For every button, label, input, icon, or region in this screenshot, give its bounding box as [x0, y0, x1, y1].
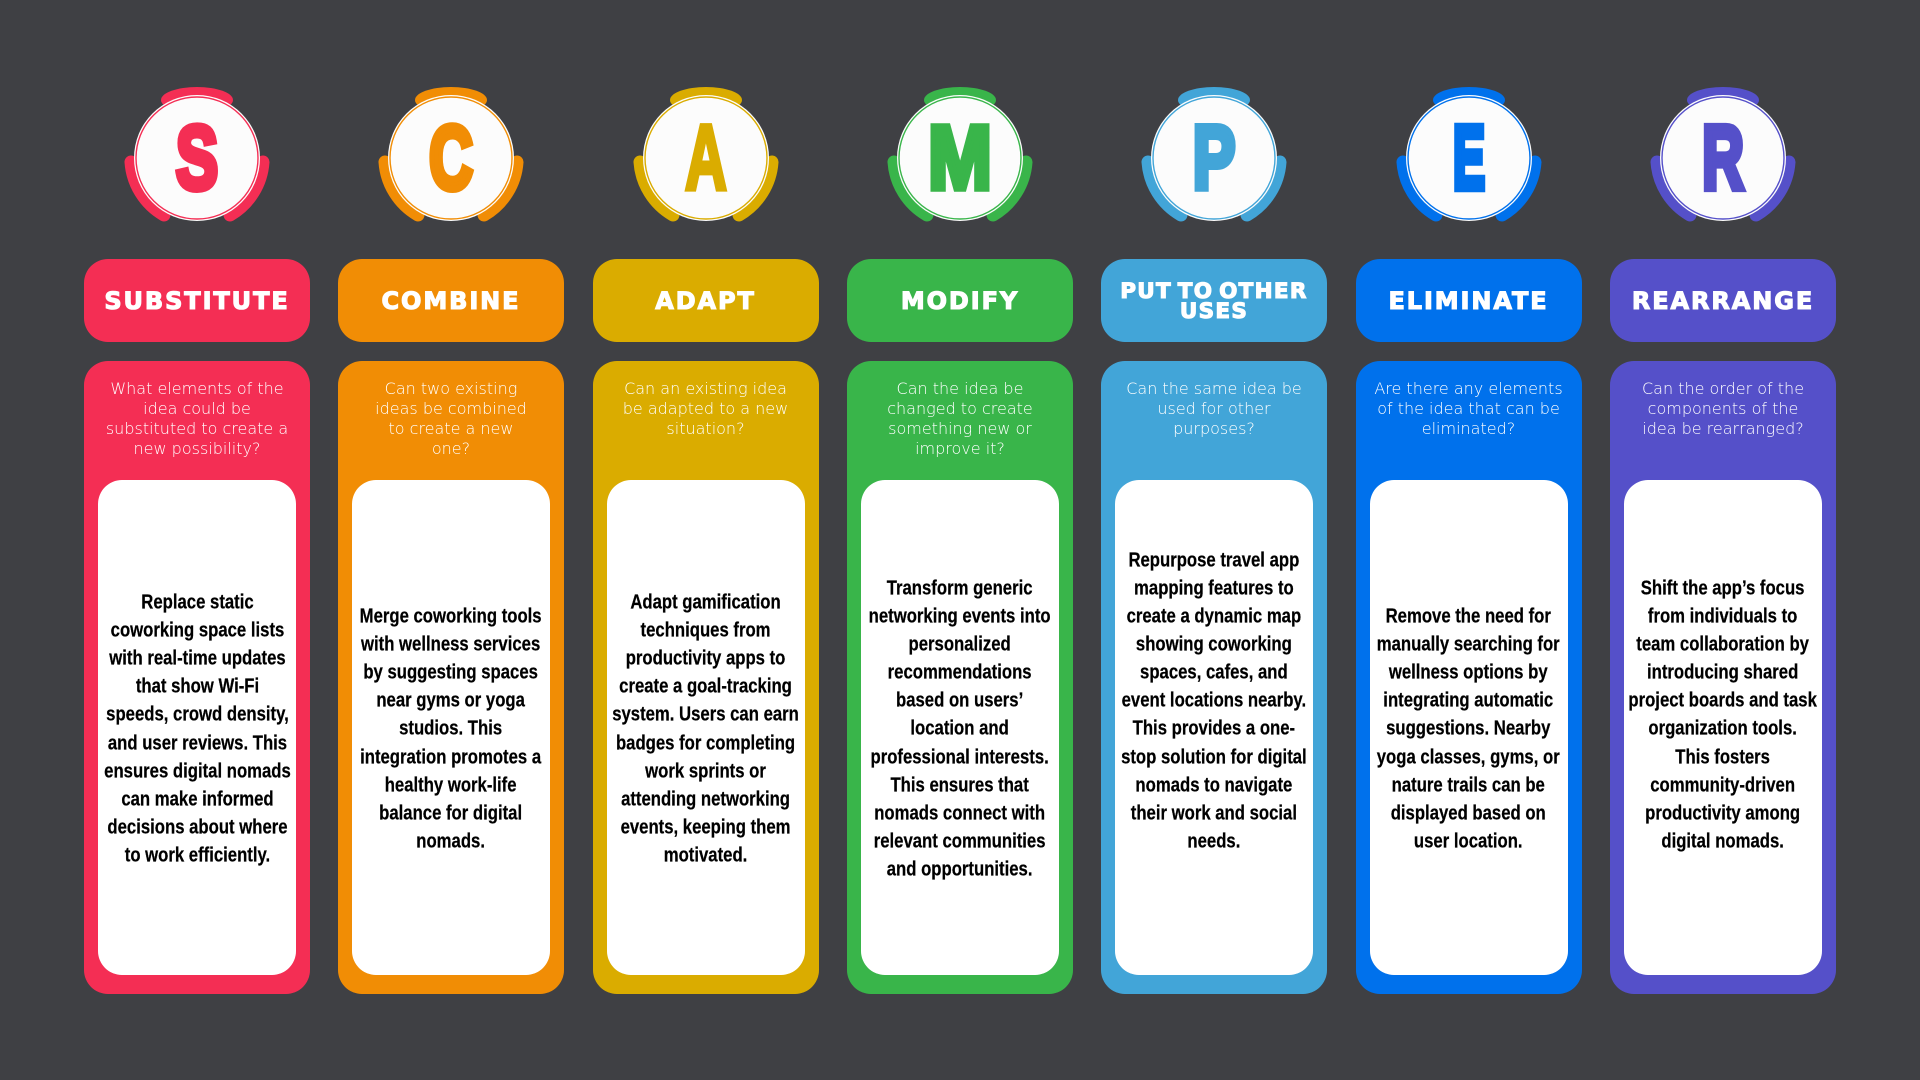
text card: adapt: badges for completing	[616, 731, 795, 754]
text card: substitute: speeds, crowd density,	[106, 703, 288, 726]
text card: put to other uses: spaces, cafes, and	[1140, 661, 1288, 684]
text card: combine: healthy work-life	[385, 773, 517, 796]
question: eliminate: Are there any elements	[1374, 378, 1563, 398]
text card: rearrange: Shift the app’s focus	[1641, 577, 1805, 600]
text card: eliminate: suggestions. Nearby	[1386, 717, 1551, 740]
text card: modify	[861, 480, 1059, 975]
text card: put to other uses: Repurpose travel app	[1129, 549, 1299, 572]
question: combine: one?	[432, 438, 470, 458]
heading: put to other uses: USES	[1180, 298, 1248, 324]
question: substitute: new possibility?	[134, 438, 260, 458]
text card: eliminate: Remove the need for	[1386, 605, 1551, 628]
heading: rearrange: REARRANGE	[1632, 286, 1814, 314]
question: substitute	[106, 378, 288, 458]
text card: put to other uses: their work and social	[1131, 801, 1297, 824]
question: eliminate: eliminated?	[1422, 418, 1515, 438]
icon: letter E badge	[1396, 87, 1542, 222]
question: eliminate: of the idea that can be	[1377, 398, 1560, 418]
text card: eliminate: manually searching for	[1377, 633, 1560, 656]
text card: substitute: can make informed	[121, 787, 273, 810]
icon: letter S badge: S	[176, 109, 218, 208]
question: rearrange: Can the order of the	[1642, 378, 1804, 398]
question: substitute: substituted to create a	[106, 418, 288, 438]
heading: substitute	[84, 259, 310, 342]
icon: letter C badge: C	[429, 109, 473, 209]
column: rearrange	[1610, 87, 1836, 994]
text card: put to other uses: create a dynamic map	[1127, 605, 1301, 628]
icon: letter C badge	[378, 87, 524, 222]
text card: adapt: events, keeping them	[621, 815, 790, 838]
heading: eliminate: ELIMINATE	[1388, 286, 1549, 314]
icon: letter M badge: M	[928, 107, 992, 208]
text card: adapt: work sprints or	[645, 759, 766, 782]
text card: adapt: create a goal-tracking	[619, 675, 792, 698]
text card: modify: Transform generic	[887, 577, 1033, 600]
panel: adapt	[592, 361, 818, 994]
text card: combine: studios. This	[399, 717, 503, 740]
text card: rearrange	[1624, 480, 1822, 975]
heading: modify	[847, 259, 1073, 342]
text card: adapt: productivity apps to	[626, 647, 785, 670]
text card: modify: personalized	[909, 633, 1011, 656]
text card: substitute: Replace static	[141, 591, 253, 614]
text card: substitute: to work efficiently.	[124, 843, 270, 866]
text card: substitute: with real-time updates	[109, 647, 285, 670]
text card: modify: recommendations	[888, 661, 1032, 684]
text card: rearrange: from individuals to	[1648, 605, 1798, 628]
question: modify: Can the idea be	[897, 378, 1023, 398]
text card: eliminate: displayed based on	[1391, 801, 1546, 824]
text card: eliminate: user location.	[1414, 829, 1523, 852]
text card: put to other uses: This provides a one-	[1133, 717, 1295, 740]
text card: substitute: ensures digital nomads	[104, 759, 290, 782]
text card: rearrange: organization tools.	[1649, 717, 1797, 740]
question: modify: improve it?	[915, 438, 1005, 458]
text card: eliminate: wellness options by	[1389, 661, 1548, 684]
heading: adapt: ADAPT	[655, 286, 756, 314]
panel: modify	[847, 361, 1073, 994]
heading: combine	[338, 259, 564, 342]
text card: eliminate: integrating automatic	[1384, 689, 1553, 712]
text card: substitute	[98, 480, 296, 975]
text card: substitute: that show Wi-Fi	[135, 675, 259, 698]
text card: substitute: decisions about where	[107, 815, 287, 838]
question: put to other uses	[1126, 378, 1302, 438]
heading: adapt	[592, 259, 818, 342]
column: combine	[338, 87, 564, 994]
panel: combine	[338, 361, 564, 994]
icon: letter S badge	[124, 87, 270, 222]
panel: eliminate	[1356, 361, 1582, 994]
question: combine: ideas be combined	[375, 398, 527, 418]
icon: letter A badge	[634, 87, 778, 222]
question: modify: something new or	[888, 418, 1032, 438]
column: put to other uses	[1101, 87, 1327, 994]
question: rearrange: components of the	[1648, 398, 1798, 418]
question: eliminate	[1374, 378, 1563, 438]
text card: modify: This ensures that	[891, 773, 1029, 796]
text card: modify: networking events into	[869, 605, 1051, 628]
text card: combine: balance for digital	[380, 801, 522, 824]
column: eliminate	[1356, 87, 1582, 994]
text card: eliminate	[1370, 480, 1568, 975]
question: substitute: What elements of the	[110, 378, 284, 398]
text card: rearrange: team collaboration by	[1637, 633, 1809, 656]
text card: rearrange: community-driven	[1651, 773, 1795, 796]
text card: adapt: attending networking	[621, 787, 790, 810]
text card: substitute: coworking space lists	[110, 619, 284, 642]
heading: eliminate	[1356, 259, 1582, 342]
text card: rearrange: project boards and task	[1629, 689, 1817, 712]
text card: modify: and opportunities.	[887, 857, 1033, 880]
text card: put to other uses	[1115, 480, 1313, 975]
text card: combine	[352, 480, 550, 975]
text card: rearrange: introducing shared	[1647, 661, 1799, 684]
column: modify	[847, 87, 1073, 994]
question: adapt: Can an existing idea	[624, 378, 787, 398]
text card: put to other uses: event locations nearby.	[1122, 689, 1306, 712]
text card: modify: location and	[911, 717, 1009, 740]
text card: rearrange: This fosters	[1676, 745, 1770, 768]
text card: rearrange: digital nomads.	[1662, 829, 1784, 852]
text card: adapt	[606, 480, 804, 975]
text card: put to other uses: stop solution for digital	[1121, 745, 1307, 768]
heading: combine: COMBINE	[382, 286, 520, 314]
panel: put to other uses	[1101, 361, 1327, 994]
question: combine: to create a new	[388, 418, 513, 438]
question: substitute: idea could be	[143, 398, 251, 418]
text card: combine: integration promotes a	[360, 745, 542, 768]
text card: adapt: techniques from	[641, 619, 770, 642]
question: adapt	[623, 378, 788, 438]
question: rearrange: idea be rearranged?	[1642, 418, 1804, 438]
question: modify	[887, 378, 1033, 458]
text card: combine: with wellness services	[361, 633, 541, 656]
column: substitute	[84, 87, 310, 994]
text card: put to other uses: nomads to navigate	[1136, 773, 1292, 796]
text card: adapt: Adapt gamification	[630, 591, 781, 614]
icon: letter A badge: A	[685, 107, 726, 210]
text card: eliminate: yoga classes, gyms, or	[1377, 745, 1560, 768]
panel: substitute	[84, 361, 310, 994]
question: put to other uses: Can the same idea be	[1126, 378, 1302, 398]
question: put to other uses: used for other	[1157, 398, 1271, 418]
question: combine	[375, 378, 527, 458]
heading: rearrange	[1610, 259, 1836, 342]
text card: modify: based on users’	[896, 689, 1024, 712]
text card: substitute: and user reviews. This	[107, 731, 287, 754]
question: adapt: be adapted to a new	[623, 398, 788, 418]
panel: rearrange	[1610, 361, 1836, 994]
heading: put to other uses: PUT TO OTHER	[1120, 278, 1308, 304]
text card: modify: relevant communities	[874, 829, 1046, 852]
question: adapt: situation?	[666, 418, 745, 438]
icon: letter P badge	[1142, 87, 1286, 222]
icon: letter P badge: P	[1193, 107, 1235, 208]
question: rearrange	[1642, 378, 1804, 438]
text card: combine: Merge coworking tools	[360, 605, 542, 628]
text card: combine: by suggesting spaces	[364, 661, 538, 684]
text card: rearrange: productivity among	[1645, 801, 1801, 824]
text card: put to other uses: mapping features to	[1134, 577, 1294, 600]
text card: modify: nomads connect with	[875, 801, 1045, 824]
question: combine: Can two existing	[385, 378, 517, 398]
question: put to other uses: purposes?	[1173, 418, 1255, 438]
heading: put to other uses	[1101, 259, 1327, 342]
icon: letter M badge	[888, 87, 1032, 222]
column: adapt	[593, 87, 819, 994]
text card: adapt: motivated.	[664, 843, 747, 866]
icon: letter R badge: R	[1702, 109, 1744, 209]
text card: adapt: system. Users can earn	[612, 703, 799, 726]
question: modify: changed to create	[887, 398, 1033, 418]
heading: substitute: SUBSTITUTE	[104, 286, 290, 314]
text card: modify: professional interests.	[871, 745, 1049, 768]
icon: letter E badge: E	[1452, 109, 1485, 209]
heading: modify: MODIFY	[901, 286, 1019, 314]
text card: combine: near gyms or yoga	[377, 689, 525, 712]
icon: letter R badge	[1650, 87, 1796, 222]
text card: put to other uses: needs.	[1188, 829, 1240, 852]
text card: put to other uses: showing coworking	[1136, 633, 1292, 656]
text card: eliminate: nature trails can be	[1392, 773, 1545, 796]
text card: combine: nomads.	[417, 829, 485, 852]
